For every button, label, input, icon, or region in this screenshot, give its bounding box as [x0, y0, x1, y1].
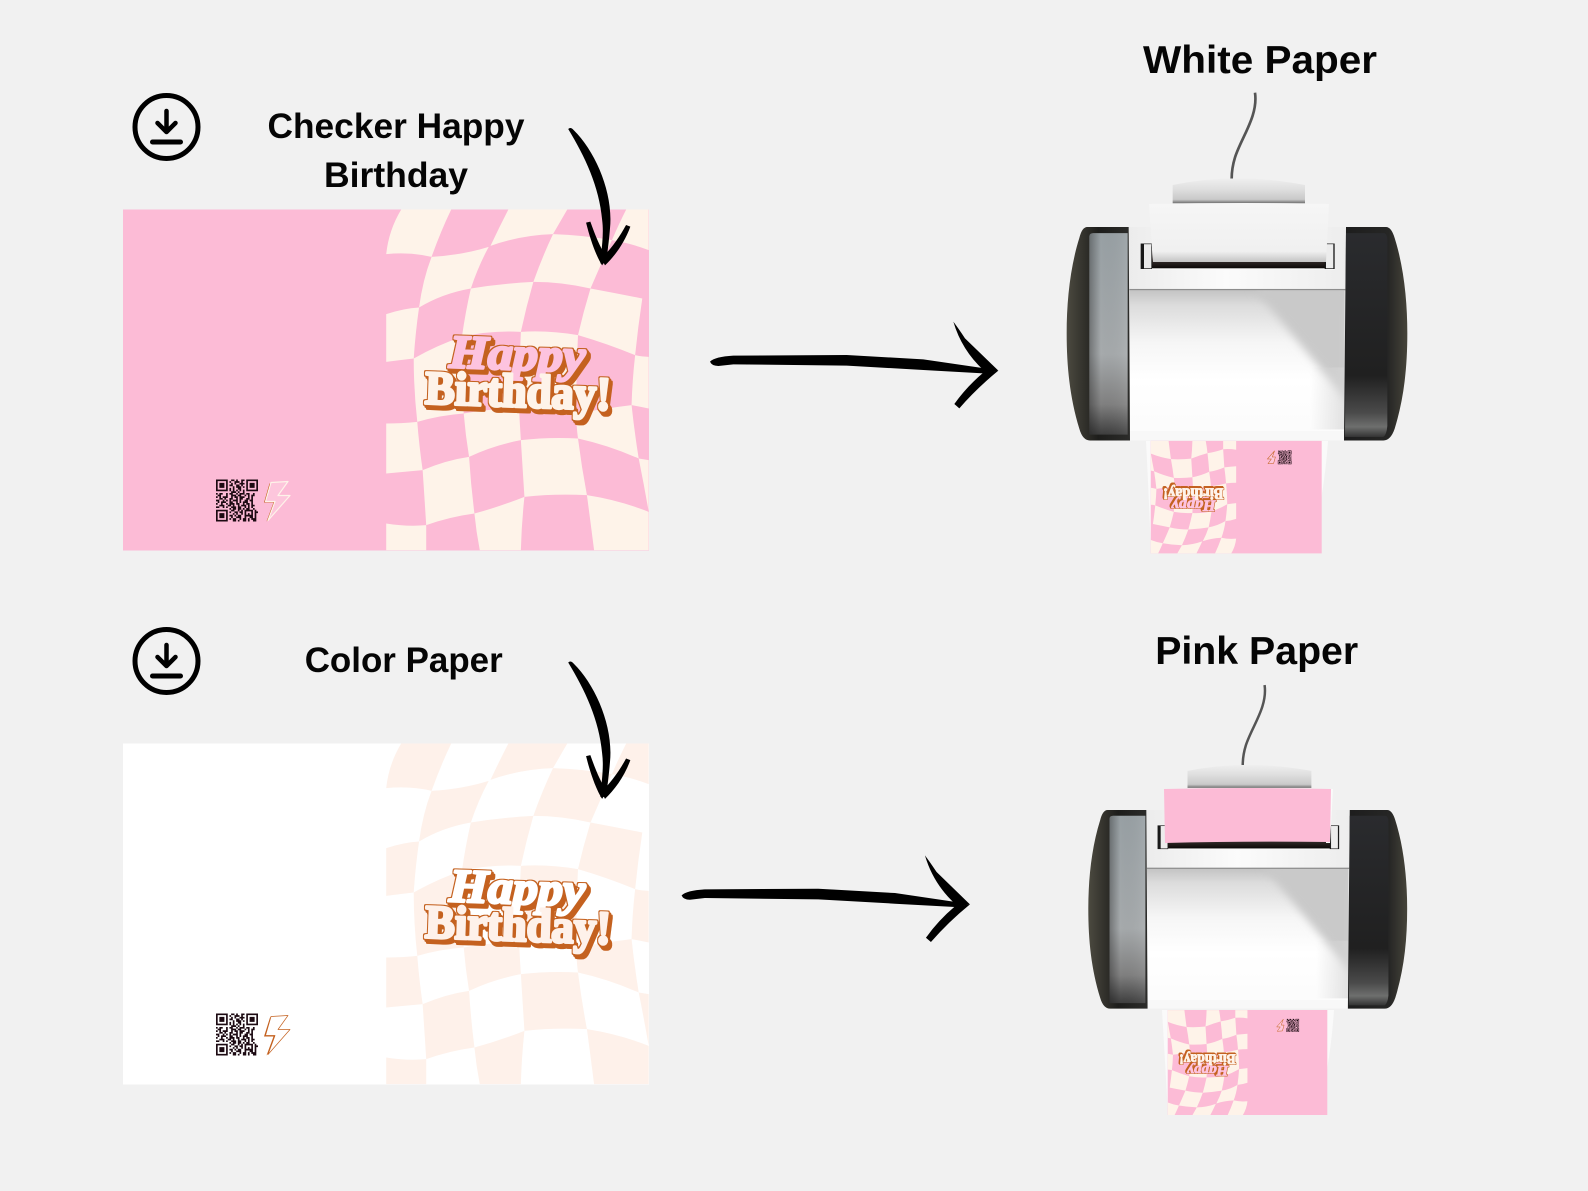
heading: Pink Paper: Pink Paper — [1155, 630, 1358, 673]
printer body — [1088, 685, 1407, 1009]
Happy Birthday lettering — [424, 326, 612, 421]
printed sheet output: Birthday! — [1163, 484, 1224, 501]
arrow: card two to printer — [682, 855, 970, 942]
pink paper in tray — [1164, 788, 1333, 843]
heading: Checker Happy Birthday — [268, 107, 525, 195]
panel: white checker card — [123, 744, 649, 1084]
panel: printer with pink paper — [1088, 685, 1407, 1115]
Happy Birthday lettering: Birthday! — [424, 362, 612, 421]
printed sheet output: Happy — [1186, 1062, 1229, 1078]
icon: lightning bolt — [264, 1016, 290, 1056]
arrow: curved to white card — [568, 662, 630, 799]
QR code — [216, 480, 258, 521]
white paper in tray — [1149, 203, 1329, 262]
heading: Checker Happy Birthday: Checker Happy — [268, 107, 525, 146]
QR code — [216, 1014, 258, 1055]
arrow: curved to pink card — [568, 128, 630, 265]
heading: Color Paper: Color Paper — [305, 641, 503, 680]
Happy Birthday lettering: Happy — [447, 326, 586, 383]
Happy Birthday lettering: Happy — [447, 860, 586, 917]
printed sheet output: Happy — [1171, 497, 1217, 514]
icon: download — [135, 630, 198, 692]
Happy Birthday lettering — [424, 860, 612, 955]
printed sheet output — [1146, 441, 1328, 553]
printed sheet output: Birthday! — [1179, 1050, 1236, 1066]
panel: pink checker card — [123, 210, 649, 550]
panel: printer with white paper — [1067, 93, 1407, 553]
heading: White Paper: White Paper — [1143, 39, 1377, 82]
heading: Checker Happy Birthday: Birthday — [324, 156, 469, 195]
icon: lightning bolt — [264, 482, 290, 522]
printed sheet output — [1162, 1010, 1334, 1115]
Happy Birthday lettering: Birthday! — [424, 896, 612, 955]
icon: download — [135, 96, 198, 158]
arrow: card one to printer — [710, 322, 998, 408]
printer body — [1067, 93, 1407, 440]
